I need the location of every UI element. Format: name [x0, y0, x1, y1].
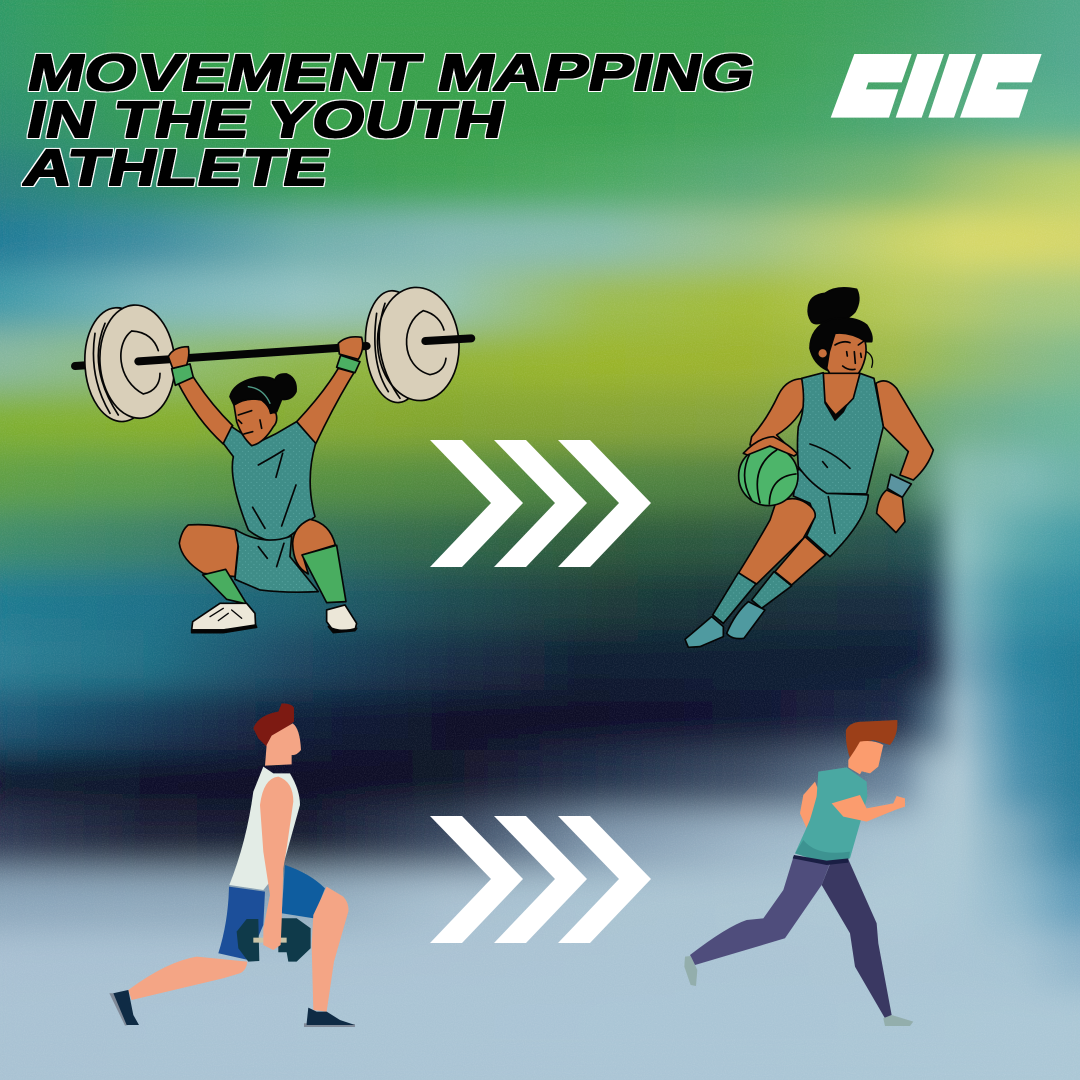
- figure: basketball player: [685, 288, 933, 647]
- face: [848, 741, 883, 773]
- left arm: [177, 376, 233, 444]
- right arm: [297, 368, 354, 444]
- title: IN THE YOUTH: [22, 91, 511, 148]
- shoes: [109, 993, 128, 1026]
- head: [234, 399, 277, 446]
- title: [19, 44, 761, 196]
- thighs: [775, 537, 826, 585]
- shorts: [793, 468, 868, 557]
- hair bun: [808, 288, 859, 324]
- socks and shoes: [713, 573, 756, 623]
- shorts back: [282, 865, 325, 918]
- arm: [260, 777, 293, 950]
- chevrons: top row: [430, 440, 651, 567]
- shorts: [235, 529, 318, 592]
- hair: [846, 720, 897, 758]
- shoes: [684, 956, 697, 986]
- logo: [831, 54, 1042, 118]
- left thigh: [179, 525, 238, 577]
- title: MOVEMENT MAPPING: [23, 44, 761, 101]
- tank: [229, 767, 300, 890]
- left arm: [750, 379, 807, 453]
- back leg: [128, 957, 247, 1000]
- head and neck: [265, 723, 301, 766]
- figure: weightlifter: [75, 285, 471, 633]
- right knee: [293, 519, 335, 574]
- back arm: [800, 782, 818, 828]
- front leg: [312, 887, 348, 1012]
- waistband: [793, 855, 848, 865]
- shirt: [223, 422, 316, 541]
- face: [827, 333, 866, 384]
- figure: lunge with dumbbell: [109, 703, 355, 1027]
- jersey: [797, 373, 883, 494]
- figure: runner: [684, 720, 913, 1026]
- shirt: [795, 767, 867, 863]
- title: ATHLETE: [19, 139, 335, 196]
- back leg: [822, 859, 892, 1018]
- neck: [848, 760, 863, 774]
- front leg: [690, 857, 830, 965]
- ball: [739, 446, 798, 506]
- dumbbell: [237, 919, 259, 962]
- right arm: [876, 381, 933, 480]
- front arm: [832, 795, 905, 822]
- chevrons: bottom row: [430, 816, 651, 943]
- hair: [253, 703, 294, 747]
